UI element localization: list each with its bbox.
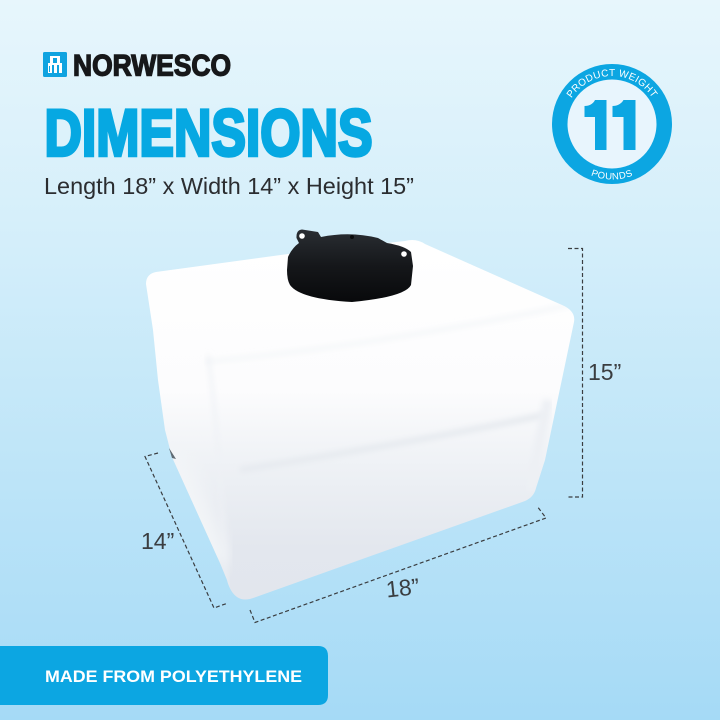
badge label bottom: POUNDS <box>592 170 632 180</box>
badge: product weight <box>552 64 672 184</box>
dimension: height 15 in <box>568 248 621 497</box>
banner text: MADE FROM POLYETHYLENE <box>45 667 302 686</box>
width label: 14” <box>141 528 174 554</box>
dimension: width 14 in <box>141 453 228 608</box>
tank illustration <box>146 230 574 600</box>
length label: 18” <box>385 573 421 602</box>
icon: logo mark <box>43 52 67 77</box>
tank body <box>146 240 574 600</box>
title: DIMENSIONS <box>44 96 372 170</box>
badge label top: PRODUCT WEIGHT <box>566 69 658 98</box>
tank shading details <box>170 305 570 590</box>
dimension: length 18 in <box>250 506 546 622</box>
logo wordmark: NORWESCO <box>73 50 231 82</box>
cap mounting holes <box>299 233 305 239</box>
tank cap <box>287 230 413 302</box>
logo: Norwesco <box>43 50 231 82</box>
material banner <box>0 646 328 705</box>
height label: 15” <box>588 359 621 385</box>
badge number: 11 <box>580 86 648 166</box>
tank foot shadow <box>169 448 176 459</box>
subtitle: overall dimensions: Length 18” x Width 14” x Height 15” <box>44 173 414 199</box>
